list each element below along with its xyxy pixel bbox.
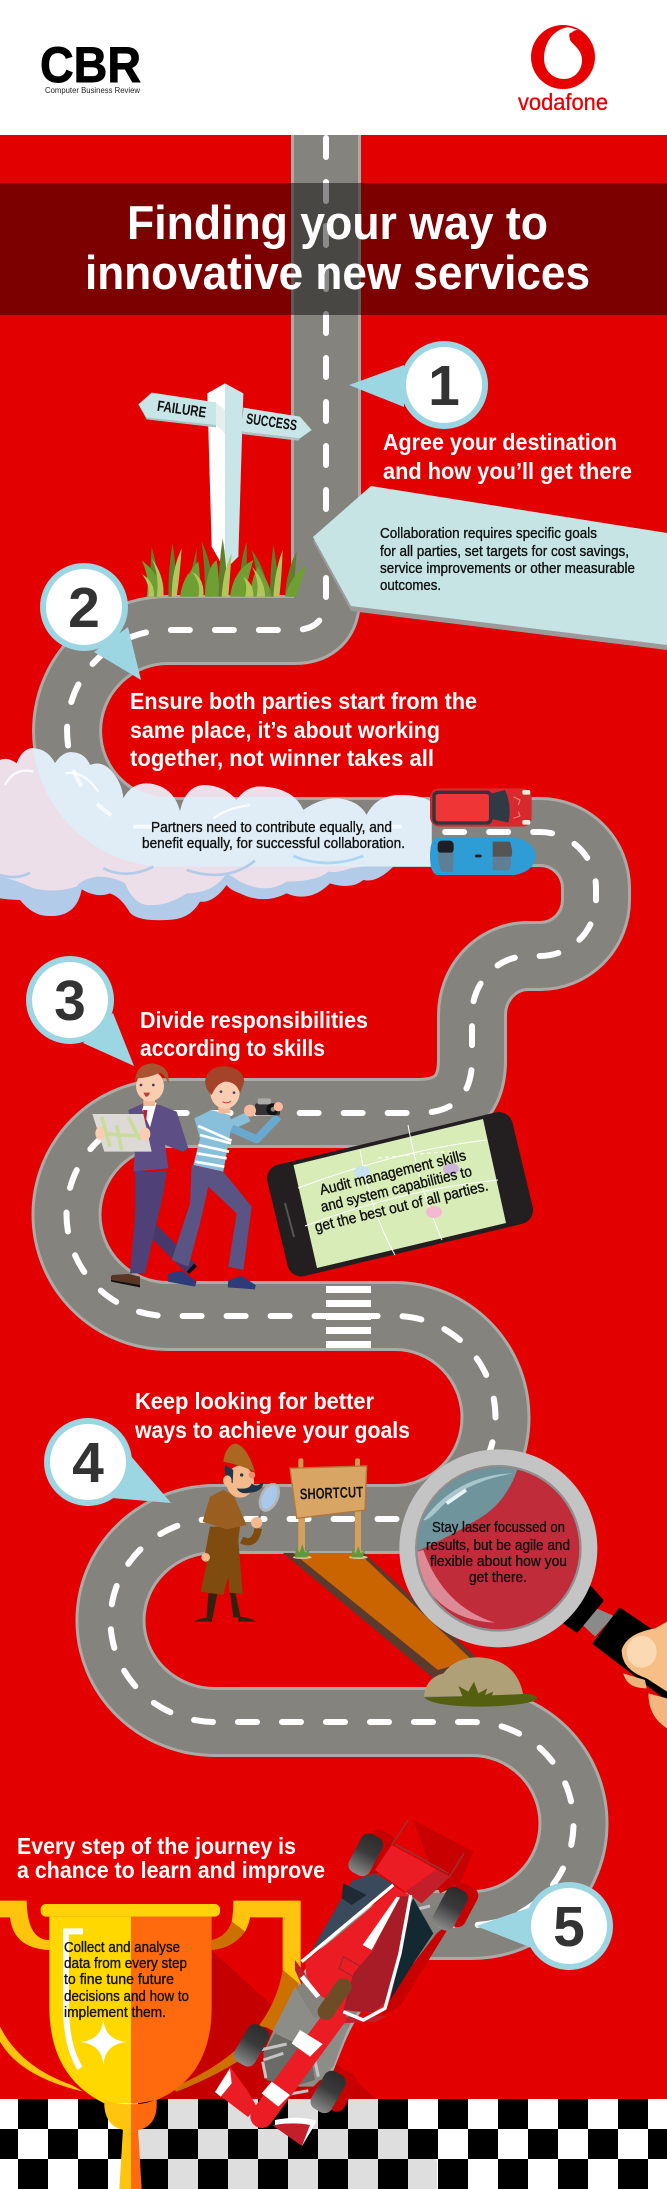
checkered finish floor [0,2099,667,2189]
heading 3: Divide responsibilities [140,1007,368,1033]
magnifying glass handle and hand [565,1588,667,1728]
callout 3 marker [26,956,134,1066]
title band [0,183,667,315]
crosswalk [326,1286,371,1348]
logo: CBR: CBR [40,37,141,93]
heading 3 [140,1007,368,1061]
panel: collaboration note [313,486,667,650]
header bar [0,0,667,135]
callout 4 marker: 4 [72,1431,104,1495]
magnifying glass lens: Stay laser focussed on [432,1519,565,1536]
heading 1: and how you’ll get there [383,458,632,484]
heading 2: Ensure both parties start from the [130,688,477,714]
trophy text: data from every step [64,1955,187,1972]
phone with note: Audit management skills [318,1147,468,1199]
shortcut sign [290,1458,368,1559]
callout 3 marker: 3 [54,969,86,1033]
callout 4 marker [44,1418,171,1506]
heading 2: together, not winner takes all [130,745,434,771]
heading 5 [17,1833,325,1883]
cloud text: benefit equally, for successful collaboration. [142,835,405,852]
trophy shadow [138,1950,437,2189]
magnifying glass lens: results, but be agile and [426,1537,570,1554]
rock [424,1657,537,1707]
heading 2: same place, it’s about working [130,717,440,743]
person: businessman with map [92,1063,197,1287]
phone with note: get the best out of all parties. [313,1178,490,1236]
logo: Vodafone: vodafone [518,89,608,115]
cloud [0,730,433,920]
grass [142,538,307,597]
panel: collaboration note: for all parties, set targets for cost savings, [380,543,629,560]
magnifying glass lens: get there. [469,1569,527,1586]
heading 5: a chance to learn and improve [17,1857,325,1883]
heading 3: according to skills [140,1035,325,1061]
logo: CBR: Computer Business Review [45,85,141,95]
blue car [430,837,536,875]
trophy text: to fine tune future [64,1971,174,1988]
heading 4: Keep looking for better [135,1388,374,1414]
trophy [0,1901,301,2189]
title [85,196,590,299]
heading 2 [130,688,477,771]
racing car [215,1820,481,2146]
callout 1 marker: 1 [428,354,460,418]
phone with note [264,1109,536,1279]
trophy text [64,1939,189,2021]
magnifying glass lens [399,1449,597,1647]
heading 4 [134,1388,410,1443]
signpost: FAILURE [156,398,207,421]
logo: Vodafone [518,25,608,115]
heading 5: Every step of the journey is [17,1833,296,1859]
magnifying glass lens: flexible about how you [430,1553,567,1570]
panel: collaboration note: outcomes. [380,577,441,594]
trophy text: Collect and analyse [64,1939,180,1956]
trophy text: implement them. [64,2004,166,2021]
heading 1: Agree your destination [383,429,617,455]
red car [430,788,532,827]
cloud text [142,819,405,852]
callout 2 marker: 2 [68,576,100,640]
trophy text: decisions and how to [64,1988,189,2005]
shortcut dirt path [283,1553,476,1678]
phone with note: and system capabilities to [319,1163,474,1216]
winding road [66,135,596,2070]
signpost: SUCCESS [245,410,298,434]
person: tourist with camera [168,1066,283,1289]
panel: collaboration note: Collaboration requires specific goals [380,525,597,542]
callout 5 marker: 5 [553,1895,585,1959]
callout 5 marker [476,1882,613,1970]
cloud text: Partners need to contribute equally, and [151,819,392,836]
title: Finding your way to [127,196,548,249]
callout 2 marker [40,563,141,680]
title: innovative new services [85,246,590,299]
panel: collaboration note: service improvements or other measurable [380,560,635,577]
signpost [138,383,312,570]
detective [194,1443,282,1622]
heading 4: ways to achieve your goals [134,1417,410,1443]
shortcut sign: SHORTCUT [300,1484,364,1503]
callout 1 marker [349,341,488,429]
heading 1 [383,429,632,484]
